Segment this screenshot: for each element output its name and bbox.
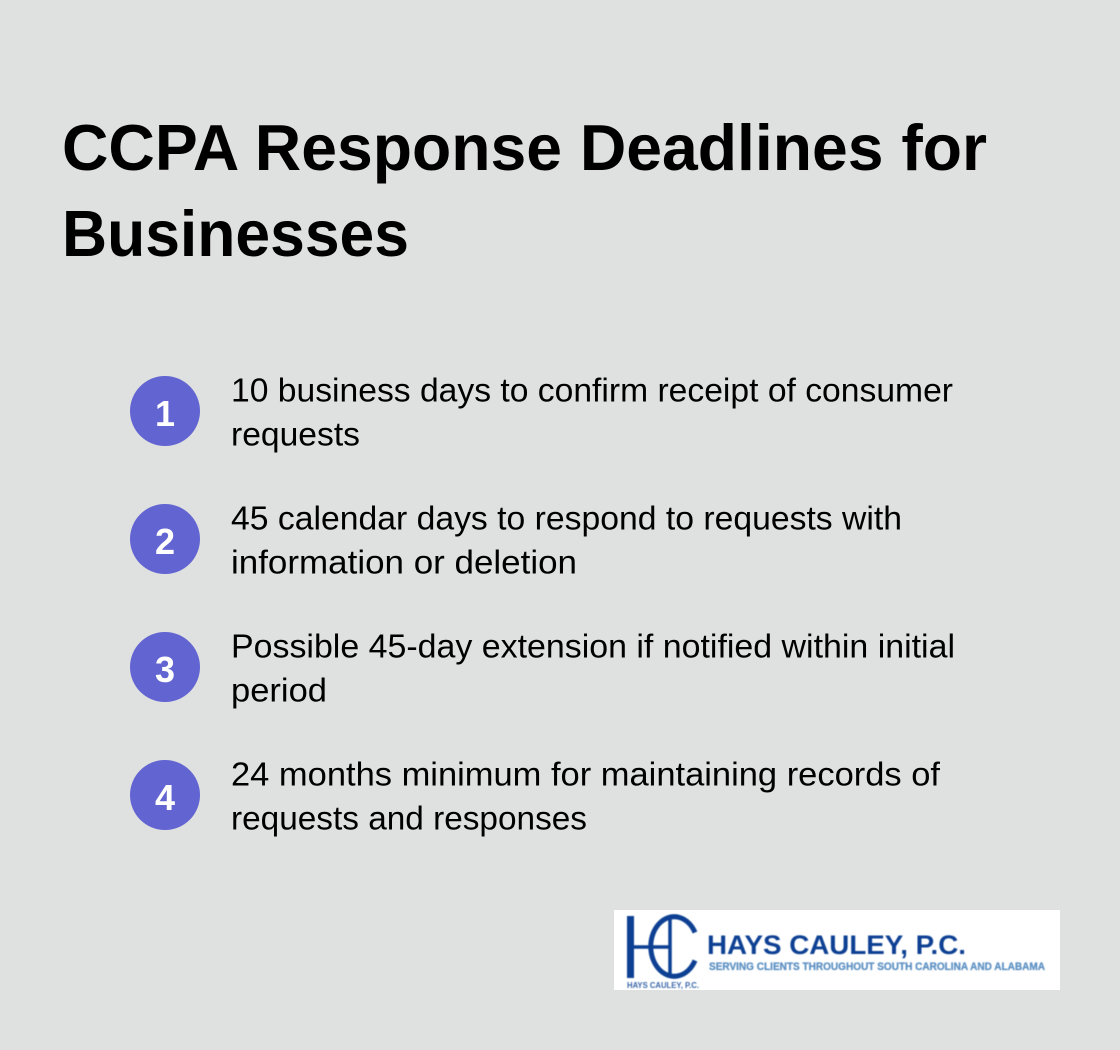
title: CCPA Response Deadlines for <box>62 111 987 184</box>
item 3: possible extension: Possible 45-day extension if notified within initial <box>231 628 955 664</box>
logo name: HAYS CAULEY, P.C. <box>707 930 966 960</box>
item 4: record keeping: 24 months minimum for maintaining records of <box>231 756 941 792</box>
list of deadlines <box>130 372 955 836</box>
item 3: possible extension: period <box>231 672 327 708</box>
item 4: record keeping <box>130 756 941 836</box>
logo: Hays Cauley, P.C. <box>614 910 1060 990</box>
item 3: possible extension: 3 <box>155 649 175 690</box>
icon: HC monogram <box>630 915 695 978</box>
item 2: respond to requests <box>130 500 902 580</box>
item 2: respond to requests: 45 calendar days to respond to requests with <box>231 500 902 536</box>
logo tagline: SERVING CLIENTS THROUGHOUT SOUTH CAROLINA AND ALABAMA <box>709 961 1045 973</box>
item 1: confirm receipt: 10 business days to confirm receipt of consumer <box>231 372 953 408</box>
item 3: possible extension <box>130 628 955 708</box>
title: Businesses <box>62 197 409 270</box>
item 4: record keeping: 4 <box>155 777 175 818</box>
title <box>62 111 987 270</box>
logo small caption: HAYS CAULEY, P.C. <box>627 981 699 990</box>
item 2: respond to requests: information or deletion <box>231 544 577 580</box>
item 1: confirm receipt <box>130 372 953 452</box>
item 2: respond to requests: 2 <box>155 521 175 562</box>
item 1: confirm receipt: requests <box>231 416 360 452</box>
item 4: record keeping: requests and responses <box>231 800 587 836</box>
item 1: confirm receipt: 1 <box>155 393 175 434</box>
